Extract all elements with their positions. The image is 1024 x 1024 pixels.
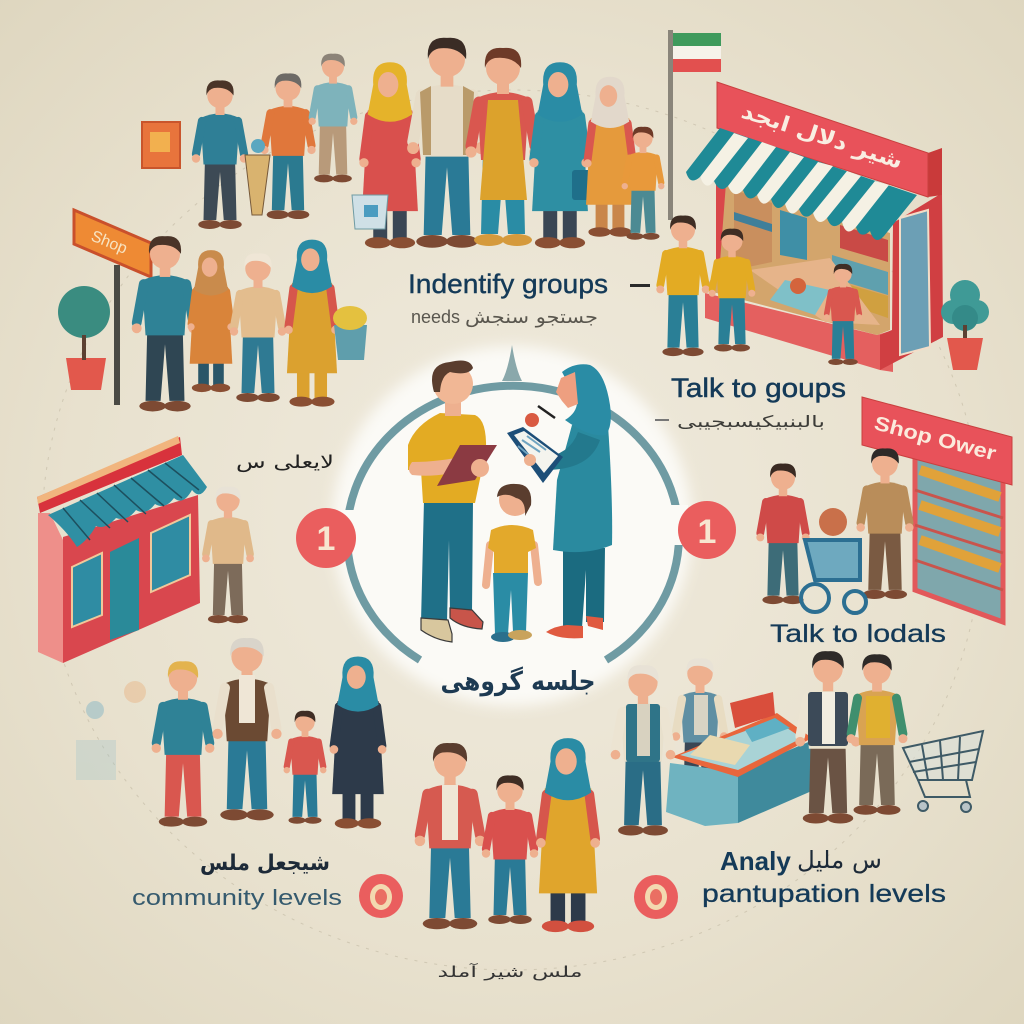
badge: left number: 1	[317, 520, 335, 558]
door	[110, 538, 139, 640]
text: talk to groups: Talk to goups	[671, 373, 846, 403]
text: analyse participation levels: pantupation levels	[702, 880, 946, 908]
ring gap left	[338, 510, 356, 550]
person: vest man	[407, 38, 487, 248]
sign: shop	[74, 210, 151, 277]
person: pale hijab	[584, 77, 636, 237]
scene: bottom right market	[611, 651, 983, 836]
window interior	[705, 183, 890, 335]
sign board	[862, 397, 1012, 485]
person: red jacket man	[415, 743, 485, 929]
person: dark coat hijab	[330, 657, 386, 829]
person: woman in red	[756, 463, 810, 604]
scene: bottom left group	[76, 638, 386, 829]
person: red coat hijab	[284, 240, 340, 407]
window left	[72, 553, 102, 627]
person: child	[622, 127, 664, 240]
figure: central boy	[486, 484, 538, 642]
person: teal jacket	[192, 80, 248, 229]
text: analyse participation levels	[702, 846, 946, 908]
person: blond woman	[152, 661, 214, 827]
person: yellow coat hijab	[536, 738, 600, 932]
person: teal hijab	[529, 62, 591, 248]
person: red shirt boy	[482, 775, 538, 924]
left pillar	[716, 183, 726, 263]
panel: striped shop top right: شیر دلال ابجد	[738, 99, 906, 174]
plant	[58, 286, 110, 390]
kid: yellow tall	[656, 215, 710, 356]
parapet top strip	[37, 436, 180, 504]
text: community levels: شیجعل ملس	[200, 851, 330, 876]
dashed outer cycle path	[42, 90, 982, 970]
person: old man	[202, 487, 254, 623]
sign: small orange	[142, 122, 180, 168]
person: orange dress	[188, 250, 234, 392]
plant	[941, 280, 989, 370]
window right	[151, 515, 190, 592]
item: wheelchair	[801, 508, 866, 613]
awning	[48, 455, 207, 547]
ring gap right	[670, 505, 688, 545]
panel: shop owner scene: Shop Ower	[872, 413, 999, 465]
person: old man behind table	[672, 658, 728, 807]
bin	[333, 306, 367, 360]
decor: faded shapes	[76, 681, 146, 780]
person: owner	[856, 448, 914, 599]
text: identify groups: Indentify groups	[408, 269, 608, 299]
item: shopping cart	[903, 731, 983, 812]
arabic caption: centre: جلسه گروهی	[440, 666, 596, 697]
person: man with lanyard	[795, 651, 861, 824]
red base	[705, 293, 893, 372]
text: talk to groups: بالبنبیکیسبجیبی	[677, 412, 825, 431]
scene: left group with shop sign	[58, 210, 367, 411]
side frame	[880, 193, 943, 370]
kid: yellow	[709, 229, 755, 352]
sign board side	[928, 148, 942, 197]
badge: bottom left	[359, 874, 403, 918]
table	[666, 692, 814, 826]
person: orange top	[260, 73, 316, 219]
item: small table	[245, 139, 270, 215]
scene: top group	[352, 38, 664, 248]
text: identify groups: جستجو سنجش	[465, 307, 598, 328]
shop left side	[38, 513, 63, 663]
item: handbag	[572, 170, 604, 200]
sign board	[717, 82, 928, 197]
person: vest man left	[611, 665, 675, 836]
badge: right number: 1	[698, 513, 716, 551]
ring arc	[347, 386, 679, 660]
scene: left shop with old man	[37, 436, 334, 663]
shop front	[63, 495, 200, 663]
sign: shop: Shop	[89, 228, 130, 258]
scene: bottom centre family	[415, 738, 600, 932]
badge: right number	[678, 501, 736, 559]
text: talk to groups	[655, 373, 846, 431]
figure: central woman in hijab with clipboard	[507, 364, 612, 638]
badge: left number	[296, 508, 356, 568]
text: analyse participation levels: س ملیل	[797, 846, 882, 874]
top pin	[502, 345, 522, 381]
door panel	[900, 210, 930, 355]
person: pale teal	[309, 54, 357, 182]
pole	[114, 265, 120, 405]
kid: red	[824, 264, 862, 365]
person: beige sweater	[230, 253, 286, 402]
scene: top left exchange	[142, 54, 357, 229]
figure: central man with clipboard	[408, 360, 497, 642]
caption: bottom arabic: ملس شیر آملد	[438, 963, 582, 981]
person: yellow hijab	[359, 62, 421, 248]
person: teal jacket	[132, 236, 198, 411]
shelves	[915, 490, 1003, 590]
person: vest man	[212, 638, 282, 820]
text: analyse participation levels: Analy	[720, 846, 791, 876]
text: community levels	[132, 851, 342, 910]
text: talk to locals: Talk to lodals	[770, 620, 946, 648]
caption: لایعلی س	[236, 452, 334, 473]
text: community levels: community levels	[132, 885, 342, 910]
person: boy red	[284, 711, 326, 824]
person: apron woman	[465, 48, 541, 246]
text: identify groups	[408, 269, 650, 328]
panel: striped shop top right	[656, 82, 989, 372]
panel: central circle	[332, 345, 692, 706]
awning	[686, 128, 917, 240]
panel: shop owner scene	[756, 397, 1012, 622]
person: woman yellow apron	[847, 654, 907, 815]
window shelves	[734, 190, 888, 325]
parapet	[37, 437, 182, 513]
badge: bottom right	[634, 875, 678, 919]
item: shopping bag	[352, 195, 388, 229]
shop body	[915, 445, 1003, 622]
text: identify groups: needs	[411, 307, 460, 327]
flag on pole	[668, 30, 721, 220]
